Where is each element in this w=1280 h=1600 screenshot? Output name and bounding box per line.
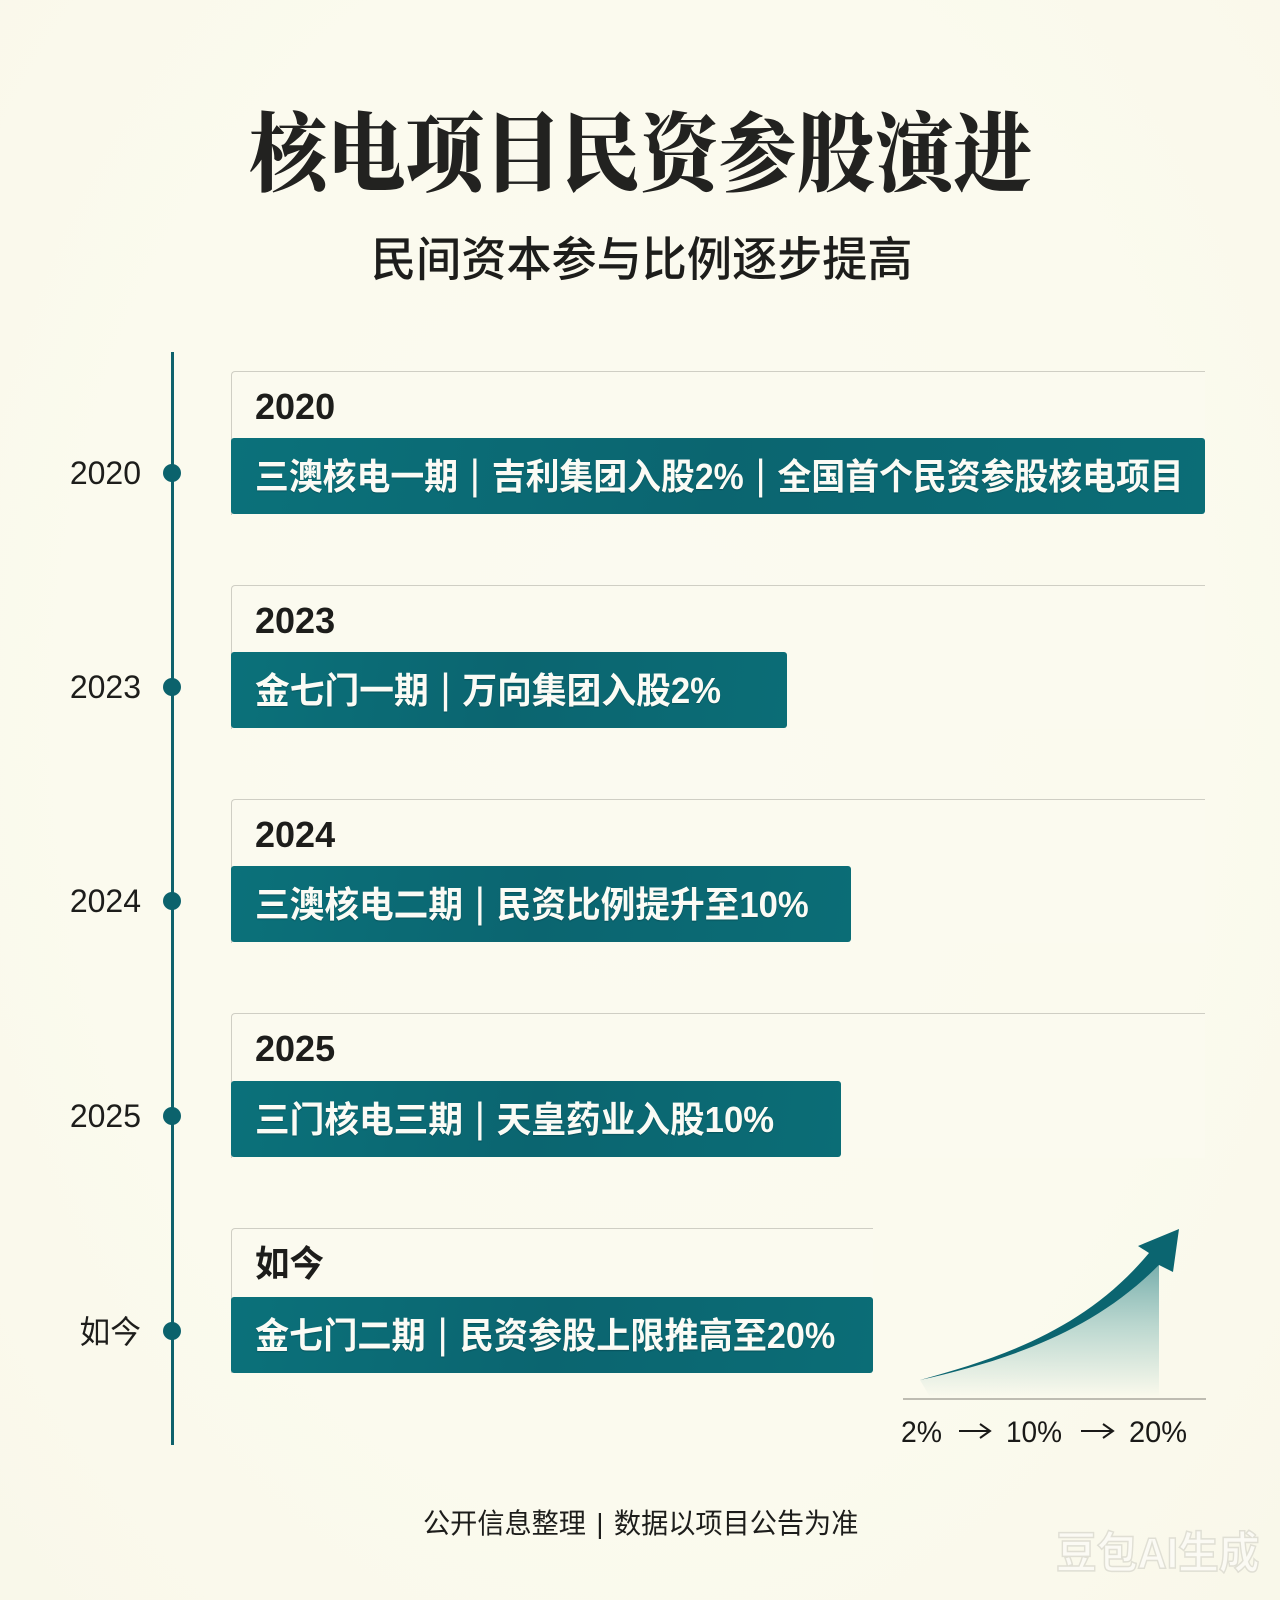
bar: 2023 event: [230, 652, 786, 728]
bar: 2024 event: [230, 866, 850, 942]
card year 2025: 2025: [255, 1028, 335, 1069]
bar: 2020 event: 三澳核电一期 | 吉利集团入股2% | 全国首个民资参股核电项目: [254, 451, 1183, 498]
label 10%: 10%: [1006, 1416, 1062, 1449]
timeline marker: 2023: [70, 669, 181, 705]
bar: 2023 event: 金七门一期 | 万向集团入股2%: [254, 665, 721, 712]
card year 2020: 2020: [255, 386, 335, 427]
arrow 2% to 10%: [959, 1424, 990, 1438]
panel: 2024: [231, 799, 1205, 943]
watermark: 豆包AI生成: [1056, 1529, 1260, 1578]
subtitle: 民间资本参与比例逐步提高: [371, 233, 912, 286]
card year 2023: 2023: [255, 600, 335, 641]
card year 如今: 如今: [255, 1243, 324, 1284]
arrow 10% to 20%: [1081, 1424, 1113, 1438]
card year 2024: 2024: [255, 814, 335, 855]
timeline marker: 如今: 如今: [80, 1314, 141, 1350]
timeline marker: 2020: 2020: [70, 455, 141, 491]
bar: 2024 event: 三澳核电二期 | 民资比例提升至10%: [254, 879, 808, 926]
rising arrow: [920, 1229, 1179, 1380]
panel: 2020: [231, 371, 1205, 515]
timeline marker: 2023: 2023: [70, 669, 141, 705]
bar: 2025 event: [230, 1081, 840, 1157]
label 20%: 20%: [1129, 1416, 1187, 1449]
panel: 2023: [231, 585, 1205, 729]
timeline marker: 2025: 2025: [70, 1098, 141, 1134]
bar: 2020 event: [230, 438, 1204, 514]
panel: 如今: [231, 1228, 873, 1373]
bar: 如今 event: [230, 1297, 872, 1373]
timeline marker: 2024: 2024: [70, 883, 141, 919]
timeline marker: 如今: [80, 1314, 181, 1350]
timeline axis: [171, 352, 174, 1445]
chart baseline: [903, 1398, 1206, 1400]
timeline marker: 2020: [70, 455, 181, 491]
title: 核电项目民资参股演进: [249, 107, 1032, 203]
growth chart: [901, 1229, 1206, 1449]
label 2%: 2%: [901, 1416, 942, 1449]
panel: 2025: [231, 1013, 1205, 1158]
timeline marker: 2024: [70, 883, 181, 919]
area under the curve: [920, 1265, 1159, 1397]
bar: 2025 event: 三门核电三期 | 天皇药业入股10%: [254, 1094, 774, 1141]
footer note: 公开信息整理 | 数据以项目公告为准: [423, 1508, 858, 1539]
bar: 如今 event: 金七门二期 | 民资参股上限推高至20%: [254, 1310, 835, 1357]
timeline marker: 2025: [70, 1098, 181, 1134]
